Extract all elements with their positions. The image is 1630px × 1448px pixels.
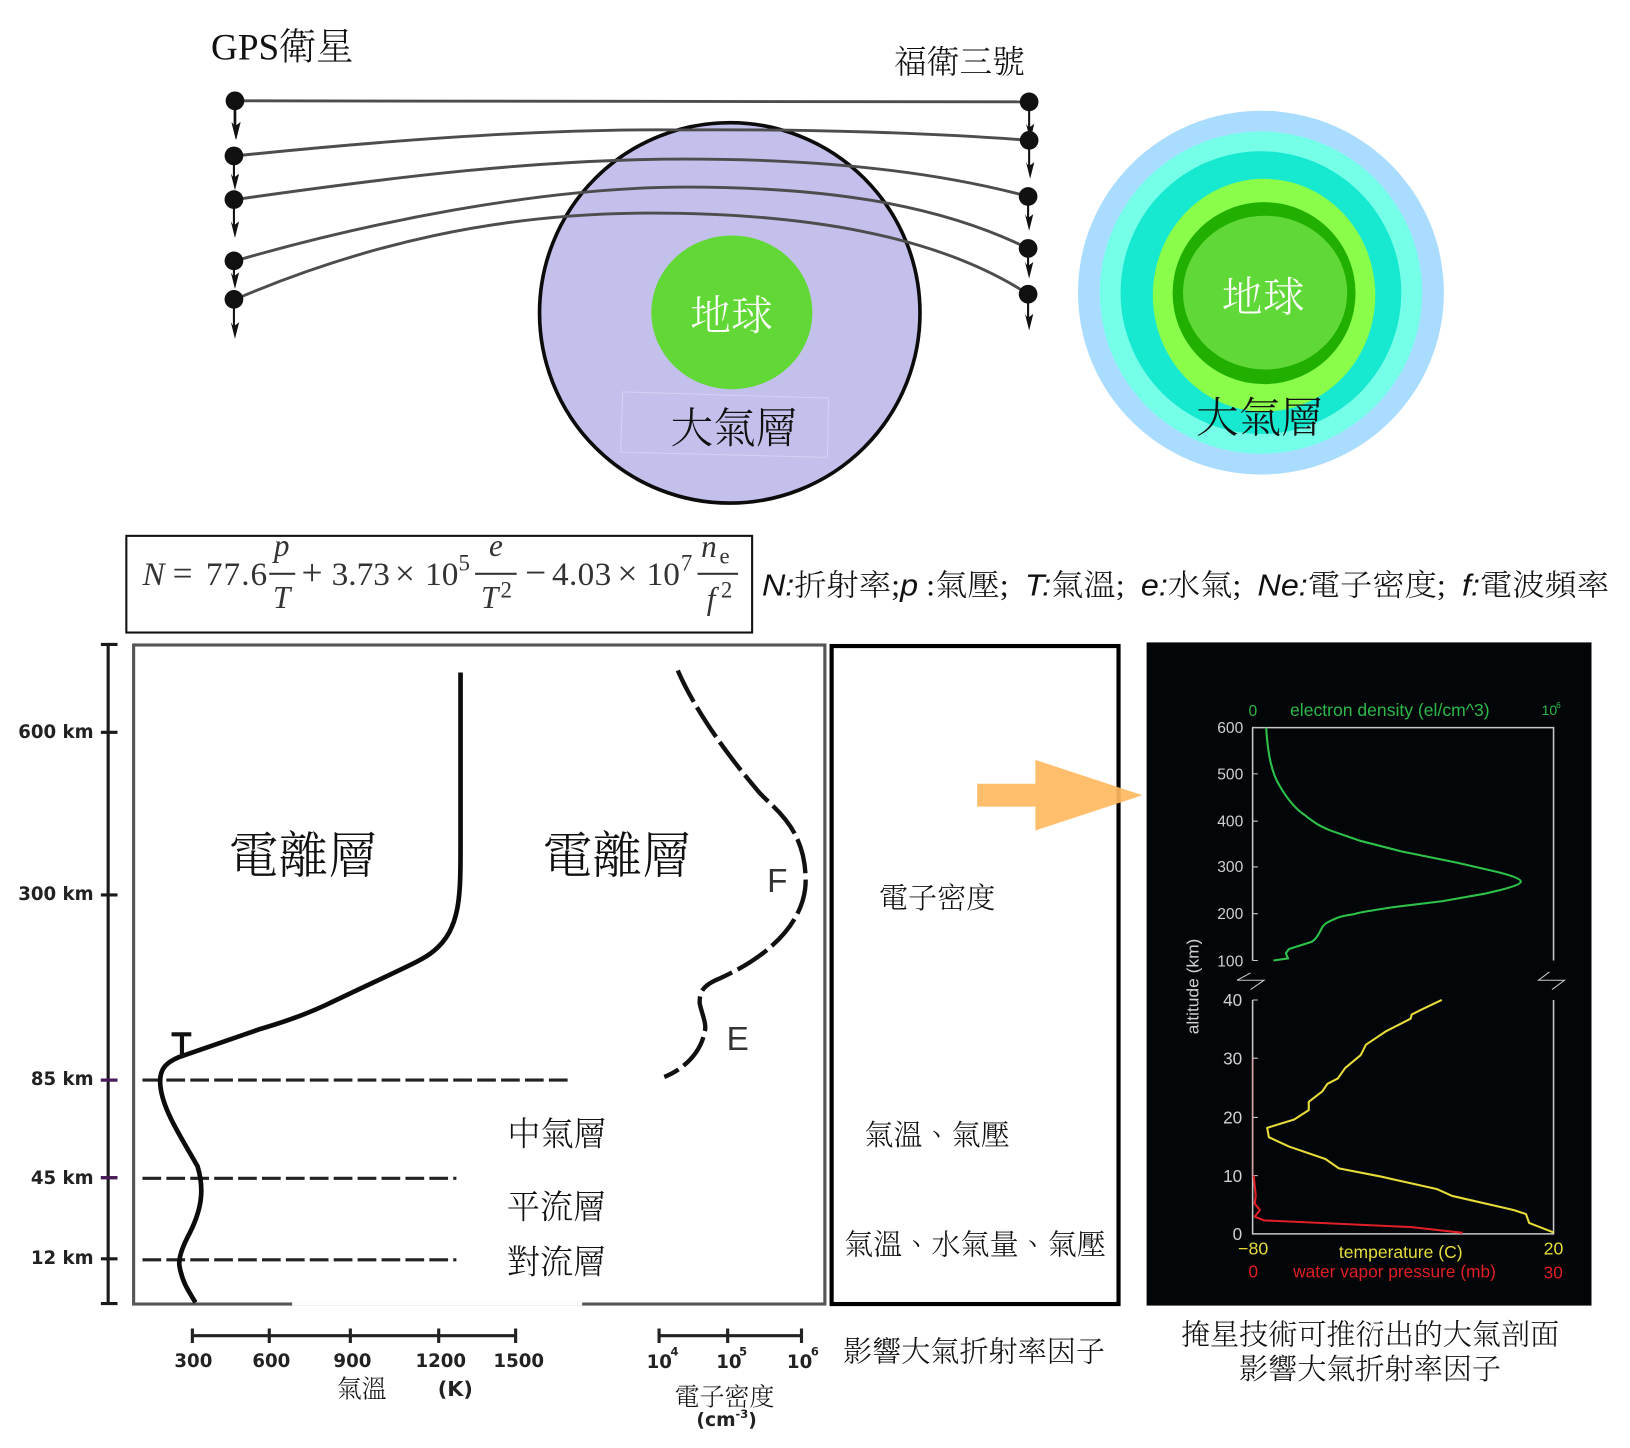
electron density profile	[1266, 728, 1521, 960]
refractivity formula: e	[489, 528, 503, 563]
temperature axis labels	[1238, 1239, 1563, 1262]
formula legend: N:折射率;p :氣壓; T:氣溫; e:水氣; Ne:電子密度; f:電波頻率	[762, 569, 1609, 603]
refractivity formula: 10	[647, 556, 680, 593]
lower altitude labels: 0	[1233, 1224, 1242, 1244]
electron density title: 6	[1556, 700, 1561, 710]
electron density axis: 5	[739, 1344, 747, 1358]
refractivity formula: 3.73	[332, 556, 390, 593]
label: F layer: F	[767, 863, 787, 900]
lower altitude labels: 30	[1223, 1048, 1242, 1068]
temperature profile	[1267, 1000, 1554, 1232]
refractivity formula: 2	[721, 578, 732, 603]
upper altitude labels: 500	[1217, 767, 1244, 784]
atmosphere circle	[540, 123, 920, 503]
temperature axis: (K)	[438, 1377, 473, 1401]
panel: refractivity factors	[832, 646, 1119, 1304]
label: ionosphere left: 電離層	[229, 829, 378, 884]
caption: retrieved profile	[1181, 1319, 1559, 1386]
temperature curve	[160, 673, 461, 1302]
signal rays	[235, 101, 1029, 299]
water vapour axis labels: 30	[1544, 1263, 1563, 1283]
temperature axis: 600	[252, 1351, 290, 1372]
electron density curve	[664, 670, 806, 1077]
refractivity formula: e	[719, 543, 730, 568]
electron density axis: )	[748, 1410, 757, 1431]
refractivity formula: 5	[458, 551, 470, 576]
caption: retrieved profile: 掩星技術可推衍出的大氣剖面	[1181, 1319, 1559, 1352]
refractivity formula: f	[707, 581, 720, 616]
refractivity formula: 77.6	[206, 556, 267, 593]
temperature axis: 氣溫	[337, 1375, 387, 1403]
electron density title: 10	[1542, 702, 1557, 718]
upper altitude labels: 200	[1217, 906, 1244, 923]
label: atmosphere: 大氣層	[671, 406, 798, 453]
temperature axis labels: 20	[1544, 1239, 1563, 1259]
temperature axis: 1200	[415, 1351, 466, 1372]
refractivity formula: 4.03	[552, 556, 611, 593]
thermosphere T marker	[172, 1034, 191, 1057]
factor: temperature, water vapour, pressure: 氣溫、水氣量、氣壓	[844, 1228, 1106, 1261]
label: troposphere: 對流層	[507, 1244, 607, 1281]
electron density axis: -3	[736, 1407, 748, 1421]
chart frame	[134, 645, 825, 1306]
electron density title: electron density (el/cm^3)	[1290, 700, 1490, 720]
panel: occultation geometry	[211, 27, 1038, 503]
altitude axis: 45 km	[31, 1168, 94, 1189]
refractivity formula: T	[273, 580, 293, 615]
caption: refractivity factors: 影響大氣折射率因子	[843, 1335, 1105, 1368]
label: E layer: E	[727, 1021, 749, 1058]
refractivity formula: +	[301, 553, 323, 594]
electron density title: 0	[1248, 703, 1257, 720]
refractivity formula: ×	[617, 554, 637, 593]
label: earth: 地球	[1221, 274, 1305, 320]
label: GPS satellites: GPS衛星	[211, 27, 353, 68]
GPS satellite positions and motion arrows	[225, 91, 244, 339]
label: ionosphere right: 電離層	[543, 829, 692, 884]
altitude axis: 600 km	[18, 722, 94, 743]
earth disc	[651, 235, 812, 389]
electron density axis: 6	[811, 1344, 819, 1358]
temperature axis labels: temperature (C)	[1339, 1242, 1463, 1262]
caption: retrieved profile: 影響大氣折射率因子	[1239, 1353, 1501, 1386]
refractivity formula: =	[173, 554, 193, 593]
label: atmosphere: 大氣層	[1196, 395, 1324, 442]
panel: atmospheric profile chart	[18, 644, 825, 1306]
refractivity formula: T	[481, 580, 501, 615]
electron density axis: 4	[671, 1344, 679, 1358]
factor: electron density: 電子密度	[879, 882, 995, 915]
refractivity formula: 10	[425, 556, 458, 593]
label: atmosphere	[621, 392, 829, 457]
panel: retrieved atmospheric profiles	[1147, 642, 1591, 1306]
altitude axis: 300 km	[18, 884, 94, 905]
upper altitude labels: 400	[1217, 813, 1244, 830]
water vapour axis labels: 0	[1248, 1262, 1258, 1282]
refractivity formula	[126, 528, 752, 633]
electron density axis	[647, 1328, 819, 1431]
altitude axis title: altitude (km)	[1184, 939, 1203, 1034]
altitude axis: 12 km	[31, 1248, 94, 1269]
altitude axis	[18, 644, 118, 1304]
refractivity formula: 7	[681, 551, 692, 576]
refractivity formula: p	[272, 528, 290, 563]
axis break marks	[1237, 972, 1564, 990]
FORMOSAT-3 positions and motion arrows	[1019, 93, 1038, 331]
lower altitude labels	[1223, 990, 1242, 1244]
arrow: electron density to profile	[977, 760, 1142, 831]
label: mesosphere: 中氣層	[507, 1117, 607, 1154]
factor: temperature and pressure: 氣溫、氣壓	[864, 1119, 1010, 1152]
temperature axis: 1500	[493, 1351, 544, 1372]
electron density axis: 10	[647, 1352, 672, 1373]
lower altitude labels: 20	[1223, 1108, 1242, 1128]
temperature axis	[174, 1328, 544, 1403]
refractivity formula: n	[701, 529, 717, 564]
water vapour axis labels: water vapor pressure (mb)	[1292, 1262, 1496, 1282]
electron density axis: 電子密度	[675, 1384, 775, 1412]
plot frame	[1253, 728, 1554, 1234]
lower altitude labels: 40	[1223, 990, 1242, 1010]
water vapour profile	[1254, 1176, 1463, 1233]
refractivity formula: N	[141, 556, 166, 593]
label: FORMOSAT-3: 福衛三號	[894, 44, 1025, 80]
temperature axis: 300	[174, 1351, 212, 1372]
label: earth: 地球	[690, 293, 773, 339]
electron density axis: 10	[787, 1352, 812, 1373]
axis ticks	[1253, 774, 1258, 1176]
electron density axis: (cm	[696, 1410, 736, 1431]
water vapour axis labels	[1248, 1262, 1563, 1283]
electron density axis: 10	[716, 1352, 742, 1373]
altitude axis: 85 km	[31, 1069, 94, 1090]
upper altitude labels	[1217, 720, 1244, 971]
refractivity formula: ×	[395, 554, 415, 593]
upper altitude labels: 300	[1217, 859, 1244, 876]
temperature axis labels: −80	[1238, 1239, 1268, 1259]
layer boundaries	[142, 1080, 570, 1260]
refractivity formula: −	[525, 553, 546, 594]
refractivity formula: 2	[501, 578, 512, 603]
electron density title	[1248, 700, 1561, 720]
lower altitude labels: 10	[1223, 1166, 1242, 1186]
label: stratosphere: 平流層	[507, 1189, 607, 1226]
panel: atmosphere layered rings	[1078, 111, 1444, 475]
temperature axis: 900	[333, 1351, 371, 1372]
upper altitude labels: 600	[1217, 720, 1244, 737]
upper altitude labels: 100	[1217, 954, 1244, 971]
